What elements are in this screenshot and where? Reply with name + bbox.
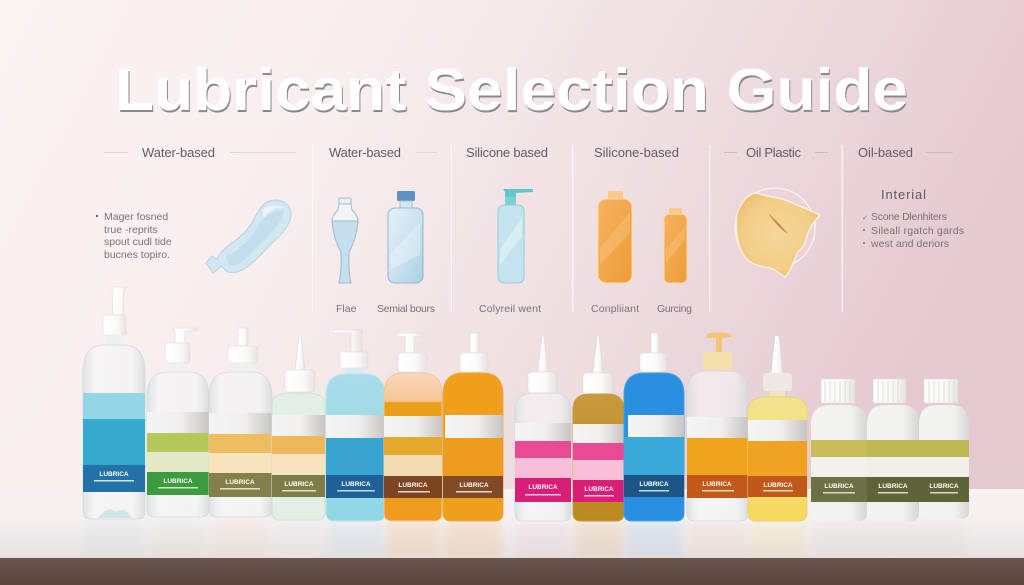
bottle 13: white screw cap <box>811 379 867 521</box>
bottle 12: yellow oil nozzle: LUBRICA <box>763 482 793 489</box>
bottle 15: white screw cap: LUBRICA <box>929 483 959 490</box>
caption: colyreil went: Colyreil went <box>479 303 541 315</box>
bottle 5: aqua pump <box>326 330 385 521</box>
heading: water-based: Water-based <box>142 145 215 160</box>
caption: semial bours: Semial bours <box>377 303 435 315</box>
bottle 7: orange nozzle <box>443 333 503 521</box>
bottle 8: clear pink label <box>515 336 571 521</box>
caption: conpliiant: Conpliiant <box>591 303 639 315</box>
icon: oil pouch <box>735 188 820 277</box>
panel: silicone-based two <box>591 145 692 315</box>
caption: gurcing: Gurcing <box>657 303 692 315</box>
text block: bullet notes: spout cudl tide <box>104 236 172 248</box>
icon: small orange bottle <box>664 208 687 283</box>
column dividers <box>312 145 843 312</box>
bottle 11: clear pump cream cap <box>687 332 748 521</box>
table surface <box>0 489 1024 558</box>
bottle 2: clear green label <box>147 328 209 517</box>
bottle 5: aqua pump: LUBRICA <box>341 481 371 488</box>
text block: checklist <box>862 211 964 250</box>
caption: flae: Flae <box>336 303 357 315</box>
bottle 1: clear blue label <box>83 287 145 519</box>
panel: silicone-based one <box>466 145 548 315</box>
bottle 15: white screw cap <box>919 379 969 519</box>
panel: water-based one <box>96 145 296 273</box>
panel: oil plastic <box>724 145 828 277</box>
heading: oil-based: Oil-based <box>858 145 913 160</box>
heading: water-based: Water-based <box>329 145 401 160</box>
icon: tilted clear bottle <box>206 200 291 273</box>
bottle 14: white screw cap <box>867 379 919 521</box>
text block: bullet notes: bucnes topiro. <box>104 249 170 261</box>
title: Lubricant Selection Guide <box>115 57 908 123</box>
text block: checklist: ✓ <box>862 215 868 222</box>
bottle 2: clear green label: LUBRICA <box>163 478 193 485</box>
panel: oil-based <box>858 145 964 250</box>
heading: silicone-based: Silicone-based <box>594 145 679 160</box>
bottle 6: peach and amber pump: LUBRICA <box>398 482 428 489</box>
bottle 4: pale green nozzle <box>272 336 325 520</box>
text block: bullet notes: Mager fosned <box>104 211 168 223</box>
bottle 3: clear olive label: LUBRICA <box>225 479 255 486</box>
bottle 3: clear olive label <box>209 328 272 517</box>
bottle 10: bright blue nozzle: LUBRICA <box>639 481 669 488</box>
bottle 1: clear blue label: LUBRICA <box>99 471 129 478</box>
panel: water-based two <box>329 145 437 315</box>
text block: checklist: Sileall rgatch gards <box>871 225 964 237</box>
bottle 4: pale green nozzle: LUBRICA <box>284 481 314 488</box>
bottle 7: orange nozzle: LUBRICA <box>459 482 489 489</box>
icon: pump bottle <box>498 189 533 283</box>
text block: checklist: west and deriors <box>870 238 949 250</box>
text block: bullet notes <box>96 211 172 261</box>
icon: flask bottle <box>332 198 358 283</box>
text block: checklist: Scone Dlenhiters <box>871 211 947 223</box>
heading: oil plastic: Oil Plastic <box>746 145 802 160</box>
subheading: interial: Interial <box>881 187 926 202</box>
bottle 9: amber with pink label: LUBRICA <box>584 486 614 493</box>
bottle 11: clear pump cream cap: LUBRICA <box>702 481 732 488</box>
product row <box>83 287 969 521</box>
icon: large orange bottle <box>598 191 632 283</box>
text block: bullet notes: true -reprits <box>104 224 158 236</box>
bottle 12: yellow oil nozzle <box>748 336 807 521</box>
bottle 9: amber with pink label <box>573 336 624 521</box>
heading: silicone based: Silicone based <box>466 145 548 160</box>
table edge <box>0 558 1024 585</box>
bottle 13: white screw cap: LUBRICA <box>824 483 854 490</box>
bottle 10: bright blue nozzle <box>624 333 684 521</box>
icon: blue-cap bottle <box>388 191 423 283</box>
bottle 8: clear pink label: LUBRICA <box>528 484 558 491</box>
bottle 6: peach and amber pump <box>384 333 442 521</box>
bottle 14: white screw cap: LUBRICA <box>878 483 908 490</box>
